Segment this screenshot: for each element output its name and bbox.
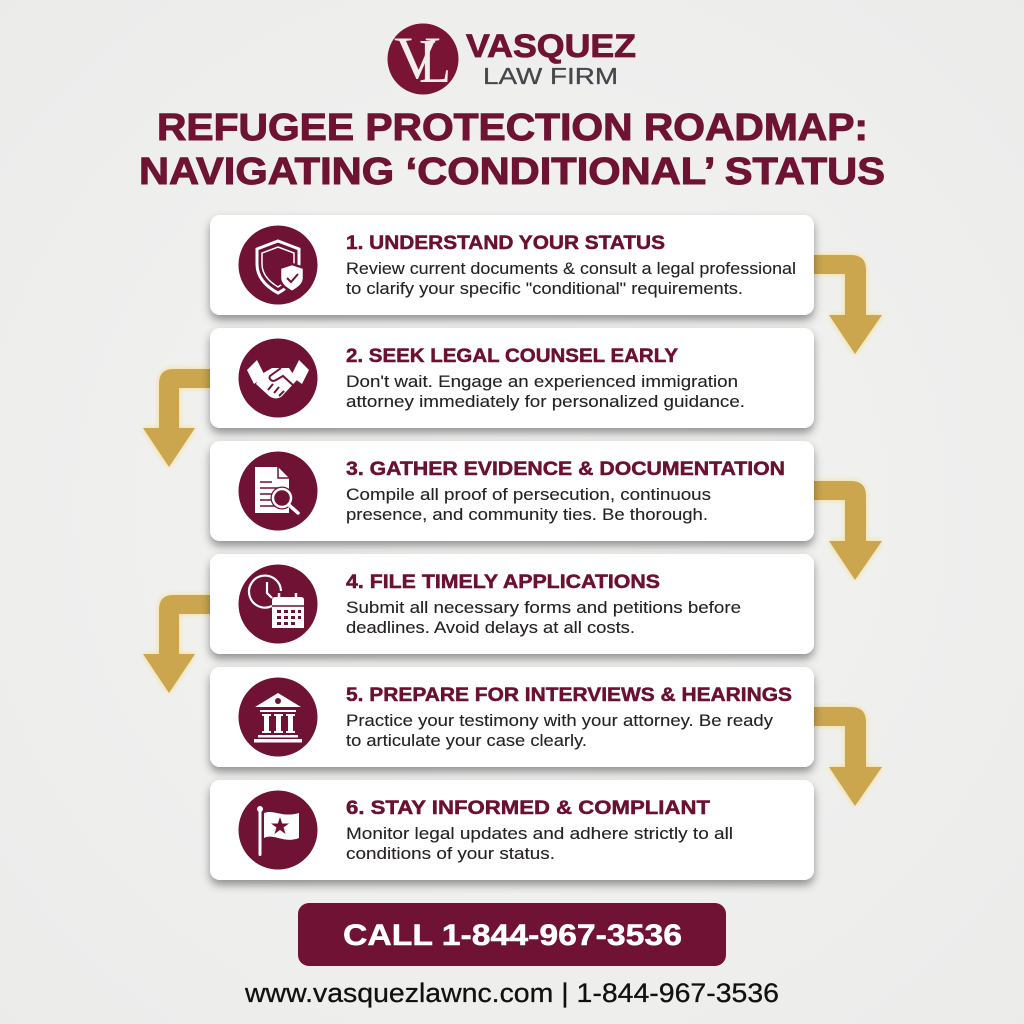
title [139, 107, 885, 193]
logo: Vasquez Law Firm [388, 24, 636, 96]
description [346, 824, 733, 863]
call to action button [298, 903, 726, 966]
icon: clock and calendar [238, 564, 318, 644]
description [346, 372, 745, 411]
panel: step 1 [210, 215, 814, 315]
description: Submit all necessary forms and petitions before [346, 598, 741, 617]
logo wordmark: VASQUEZ [466, 28, 636, 64]
heading: 2. SEEK LEGAL COUNSEL EARLY [346, 345, 678, 367]
logo emblem: V [394, 25, 440, 91]
panel: step 4 [210, 554, 814, 654]
title: REFUGEE PROTECTION ROADMAP: [157, 107, 868, 149]
panel: step 6 [210, 780, 814, 880]
description: Monitor legal updates and adhere strictly to all [346, 824, 733, 843]
description: attorney immediately for personalized guidance. [346, 392, 745, 411]
panel: step 2 [210, 328, 814, 428]
icon: courthouse [238, 678, 318, 756]
call to action button: CALL 1-844-967-3536 [343, 919, 682, 952]
logo wordmark: LAW FIRM [483, 63, 618, 89]
logo emblem: L [419, 28, 451, 96]
logo emblem [388, 24, 458, 96]
icon: document with magnifier [238, 452, 318, 530]
description: Compile all proof of persecution, continuous [346, 485, 711, 504]
description [346, 485, 711, 524]
icon: shield with check [238, 226, 318, 304]
description: Practice your testimony with your attorney. Be ready [346, 711, 774, 730]
arrow: step 2 to step 3 [143, 369, 210, 467]
heading: 4. FILE TIMELY APPLICATIONS [346, 571, 660, 593]
heading: 5. PREPARE FOR INTERVIEWS & HEARINGS [346, 684, 792, 706]
arrow: step 1 to step 2 [814, 255, 882, 354]
icon: handshake [238, 338, 318, 418]
description: conditions of your status. [346, 844, 555, 863]
description: Don't wait. Engage an experienced immigration [346, 372, 738, 391]
arrow: step 4 to step 5 [143, 595, 210, 693]
footer contact line: www.vasquezlawnc.com | 1-844-967-3536 [244, 978, 779, 1008]
icon: flag with star [238, 790, 318, 870]
description [346, 259, 796, 298]
description: to clarify your specific "conditional" requirements. [346, 279, 743, 298]
panel: step 3 [210, 441, 814, 541]
description: deadlines. Avoid delays at all costs. [346, 618, 635, 637]
arrow: step 5 to step 6 [814, 707, 882, 806]
description: Review current documents & consult a legal professional [346, 259, 796, 278]
panel: step 5 [210, 667, 814, 767]
description: to articulate your case clearly. [346, 731, 587, 750]
logo wordmark [466, 28, 636, 89]
heading: 3. GATHER EVIDENCE & DOCUMENTATION [346, 458, 785, 480]
arrow: step 3 to step 4 [814, 481, 882, 580]
heading: 6. STAY INFORMED & COMPLIANT [346, 797, 710, 819]
title: NAVIGATING ‘CONDITIONAL’ STATUS [139, 151, 885, 193]
description: presence, and community ties. Be thorough. [346, 505, 708, 524]
description [346, 598, 741, 637]
description [346, 711, 774, 750]
heading: 1. UNDERSTAND YOUR STATUS [346, 232, 665, 254]
